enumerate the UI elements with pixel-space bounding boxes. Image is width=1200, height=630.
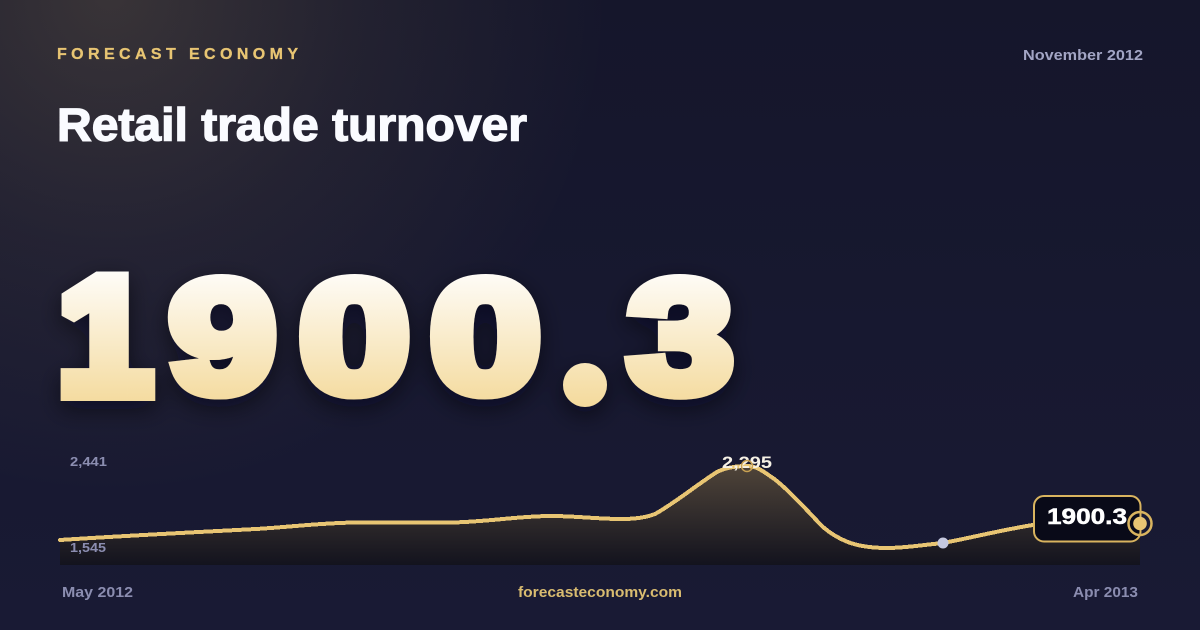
headline value: 9 (169, 248, 276, 426)
date label: November 2012 (1023, 47, 1143, 64)
current marker (1128, 512, 1152, 535)
axis max label: 2,441 (70, 454, 107, 469)
headline value (58, 244, 733, 429)
end date label: Apr 2013 (1073, 585, 1138, 601)
headline value: 3 (628, 249, 733, 426)
current value badge (1034, 496, 1140, 542)
headline value: 1 (58, 244, 152, 429)
headline value: 0 (299, 248, 410, 426)
headline value: . (572, 310, 598, 410)
peak marker (742, 460, 752, 472)
peak value label: 2,295 (722, 453, 772, 472)
axis min label: 1,545 (70, 540, 106, 555)
midpoint marker (938, 538, 948, 548)
headline value: 0 (430, 248, 541, 426)
area fill (60, 466, 1140, 565)
trend line (60, 466, 1042, 548)
sparkline chart (60, 453, 1152, 565)
title: Retail trade turnover (57, 98, 527, 150)
current value badge: 1900.3 (1047, 504, 1127, 529)
start date label: May 2012 (62, 585, 133, 601)
brand label: FORECAST ECONOMY (57, 46, 303, 63)
website: forecasteconomy.com (518, 585, 682, 601)
